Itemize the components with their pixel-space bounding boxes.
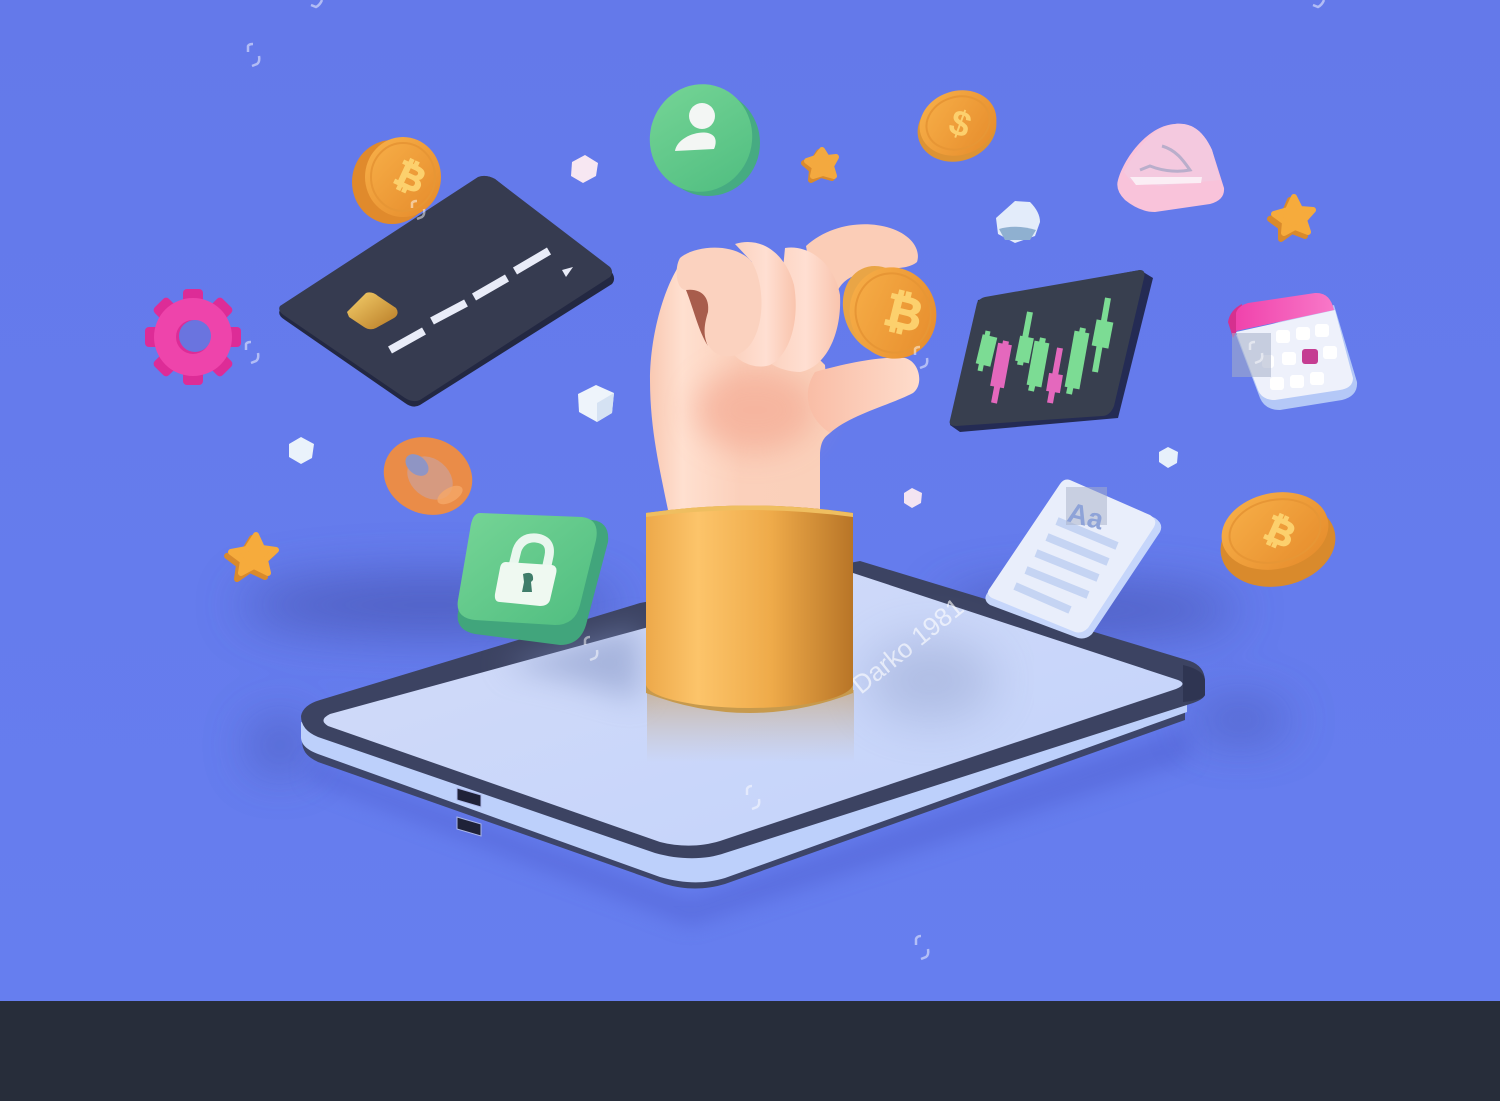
star small top bbox=[804, 152, 834, 180]
coin: dollar bbox=[909, 81, 1005, 172]
credit card bbox=[279, 176, 614, 407]
document lines bbox=[1015, 521, 1117, 610]
coin: bitcoin top left: ₿ bbox=[388, 153, 432, 202]
tablet ground shadow bbox=[310, 725, 1190, 925]
palm shading bbox=[695, 368, 815, 452]
card chip bbox=[347, 292, 398, 329]
tablet screen bbox=[323, 572, 1183, 846]
tablet lower edge bbox=[302, 700, 1185, 888]
finger 1 bbox=[677, 248, 762, 356]
icon: stars bbox=[227, 150, 1313, 579]
document heading Aa bbox=[1066, 487, 1107, 525]
coin held: bitcoin: ₿ bbox=[879, 282, 929, 343]
green candles bbox=[980, 298, 1108, 394]
cuff reflection bbox=[647, 690, 854, 762]
bottom bar bbox=[0, 1001, 1500, 1101]
finger 2 bbox=[730, 242, 796, 367]
fingers bbox=[677, 242, 840, 372]
card number dashes bbox=[390, 251, 549, 350]
floating objects shadows bbox=[240, 577, 1290, 769]
document bbox=[985, 480, 1161, 638]
calendar watermark patch bbox=[1232, 333, 1271, 377]
star right bbox=[1270, 200, 1310, 239]
icon: user badge bbox=[638, 73, 764, 203]
coin: dollar: $ bbox=[944, 101, 977, 146]
coin: bitcoin bottom right: ₿ bbox=[1258, 508, 1301, 557]
hand bbox=[650, 224, 919, 510]
index finger bbox=[806, 224, 918, 290]
pink candles bbox=[994, 341, 1060, 403]
coin: bitcoin top left bbox=[352, 137, 441, 224]
coin: bitcoin bottom right bbox=[1213, 483, 1343, 597]
star left bbox=[227, 538, 273, 579]
thumb bbox=[808, 358, 919, 433]
tablet buttons bbox=[457, 788, 481, 836]
finger crease bbox=[686, 290, 708, 346]
finger 3 bbox=[764, 248, 840, 372]
icon: stock chart panel bbox=[950, 270, 1153, 432]
icon: padlock tile bbox=[458, 513, 608, 645]
icon: gear bbox=[145, 289, 241, 385]
watermark marks bbox=[246, 0, 1324, 959]
screen shadow bbox=[500, 625, 640, 700]
document: Aa bbox=[1065, 497, 1107, 536]
icon: orange ring bbox=[373, 425, 483, 527]
coin held: bitcoin bbox=[831, 255, 949, 371]
cuff shadow on screen bbox=[865, 640, 995, 720]
tablet bbox=[301, 561, 1205, 925]
palm bbox=[650, 252, 830, 510]
side button right bbox=[1183, 665, 1205, 702]
icon: pink shoe tile bbox=[1117, 124, 1224, 212]
cubes bbox=[289, 155, 1178, 508]
watermark: Darko 1981: Darko 1981 bbox=[846, 592, 969, 700]
calendar cells bbox=[1262, 324, 1337, 390]
tablet side bbox=[301, 695, 1187, 882]
icon: calendar bbox=[1228, 293, 1357, 410]
tablet bezel bbox=[301, 561, 1205, 858]
cuff bbox=[646, 506, 853, 713]
